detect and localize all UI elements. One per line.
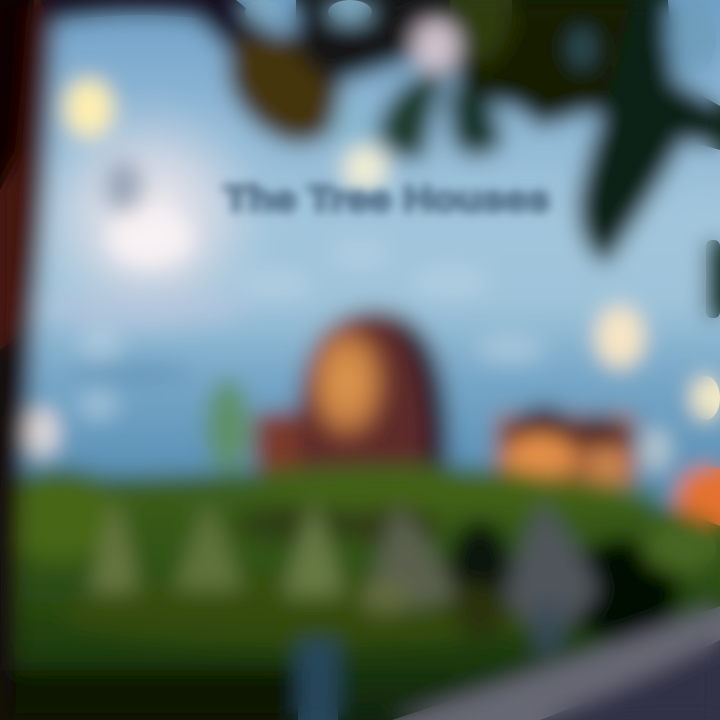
pale lantern in canopy xyxy=(413,20,459,72)
road xyxy=(392,606,720,720)
sun glow xyxy=(25,90,275,340)
building: large dome xyxy=(254,310,448,473)
sky gaps in canopy xyxy=(245,0,716,148)
garden figures xyxy=(90,496,598,655)
dark cloud band xyxy=(68,360,192,384)
small tree behind dome xyxy=(206,379,250,471)
blue post xyxy=(298,640,338,720)
building: right cottage xyxy=(496,405,636,490)
tree branch along top xyxy=(40,0,290,80)
small blurred icon xyxy=(104,161,144,213)
dark leaf at right edge xyxy=(706,240,720,318)
hanging lanterns xyxy=(25,79,720,472)
building: orange far right xyxy=(672,466,720,526)
blurred headline: The Tree Houses xyxy=(224,178,550,219)
tree canopy xyxy=(228,0,720,266)
tree trunk xyxy=(0,0,56,720)
green garden ground xyxy=(0,465,720,720)
clouds xyxy=(78,243,544,421)
